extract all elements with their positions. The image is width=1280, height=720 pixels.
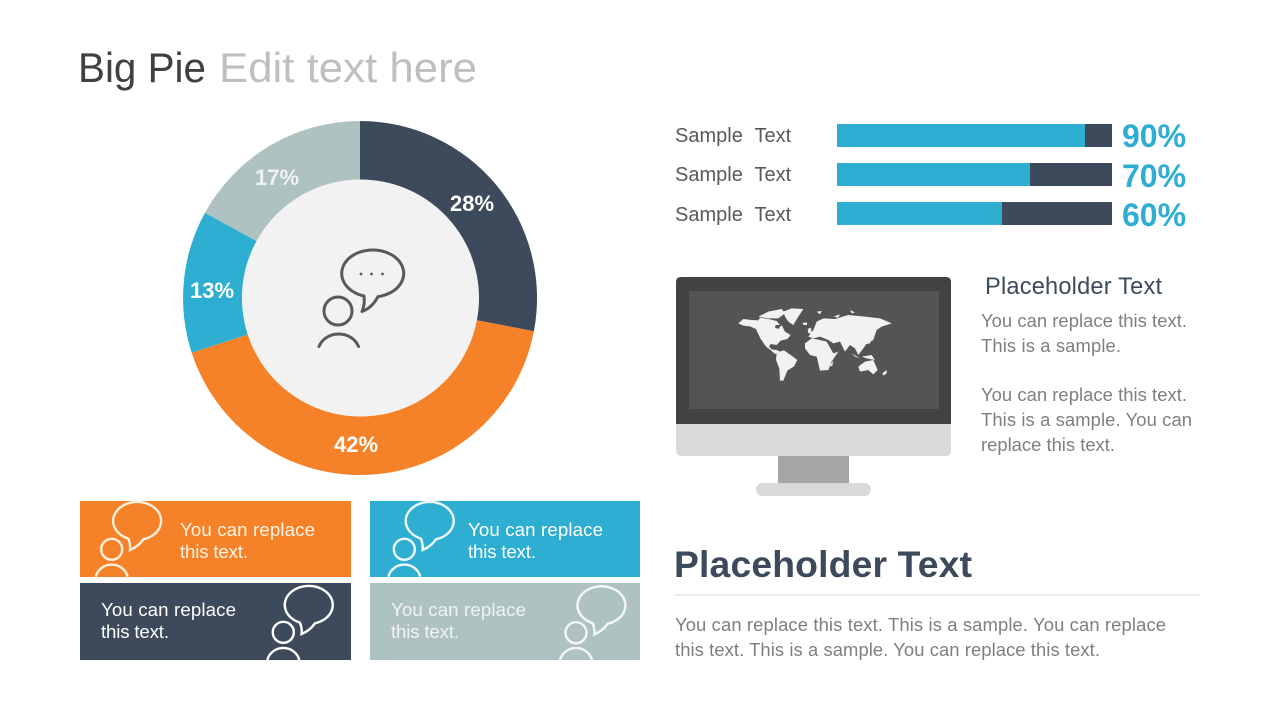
world map [738,308,892,381]
title [78,44,477,91]
title: Big Pie [78,44,206,91]
bar row: 70% [675,158,1186,194]
title: Edit text here [219,44,477,91]
icon: person with speech bubble [319,250,404,346]
segment: 17% [205,121,360,241]
callout: orange [80,501,351,577]
callout text: You can replace [180,519,315,540]
segment: 13% [183,213,257,353]
text block: bottom [674,543,1200,660]
icon: person with bubble [560,586,625,660]
label: 42%: 42% [334,432,378,457]
paragraph: You can replace this text. [981,310,1187,331]
heading: Placeholder Text [985,274,1162,300]
text block: monitor description [981,274,1192,455]
callout text: You can replace [101,599,236,620]
bar row: 60% [675,197,1186,233]
callout text: this text. [180,541,248,562]
callout text: You can replace [468,519,603,540]
icon: person with bubble [388,502,454,577]
donut chart [183,121,537,475]
paragraph: replace this text. [981,434,1115,455]
callout: blue [370,501,640,577]
icon: person with bubble [267,586,333,660]
callout: grey [370,583,640,660]
bar row: 70%: Sample Text [675,164,792,186]
label: 28%: 28% [450,191,494,216]
paragraph: This is a sample. [981,335,1121,356]
paragraph: this text. This is a sample. You can replace this text. [675,639,1100,660]
donut centre [242,180,479,416]
icon: person with bubble [96,502,161,577]
bar row: 60%: Sample Text [675,204,792,226]
bar row: 70%: 70% [1122,158,1186,194]
bar row: 90%: 90% [1122,118,1186,154]
icon: desktop monitor with world map [676,277,951,496]
label: 17%: 17% [255,165,299,190]
bar row: 90% [675,118,1186,154]
paragraph [981,310,1192,455]
bar row: 60%: 60% [1122,197,1186,233]
callout text: this text. [101,621,169,642]
bar row: 90%: Sample Text [675,125,792,147]
callout text: You can replace [391,599,526,620]
paragraph: You can replace this text. This is a sample. You can replace [675,614,1166,635]
segment: 42% [192,320,534,475]
callout text: this text. [468,541,536,562]
paragraph [675,614,1166,660]
heading: Placeholder Text [674,543,972,585]
segment: 28% [360,121,537,331]
paragraph: This is a sample. You can [981,409,1192,430]
paragraph: You can replace this text. [981,384,1187,405]
callout: navy [80,583,351,660]
label: 13%: 13% [190,278,234,303]
progress bars [675,118,1186,233]
callout text: this text. [391,621,459,642]
